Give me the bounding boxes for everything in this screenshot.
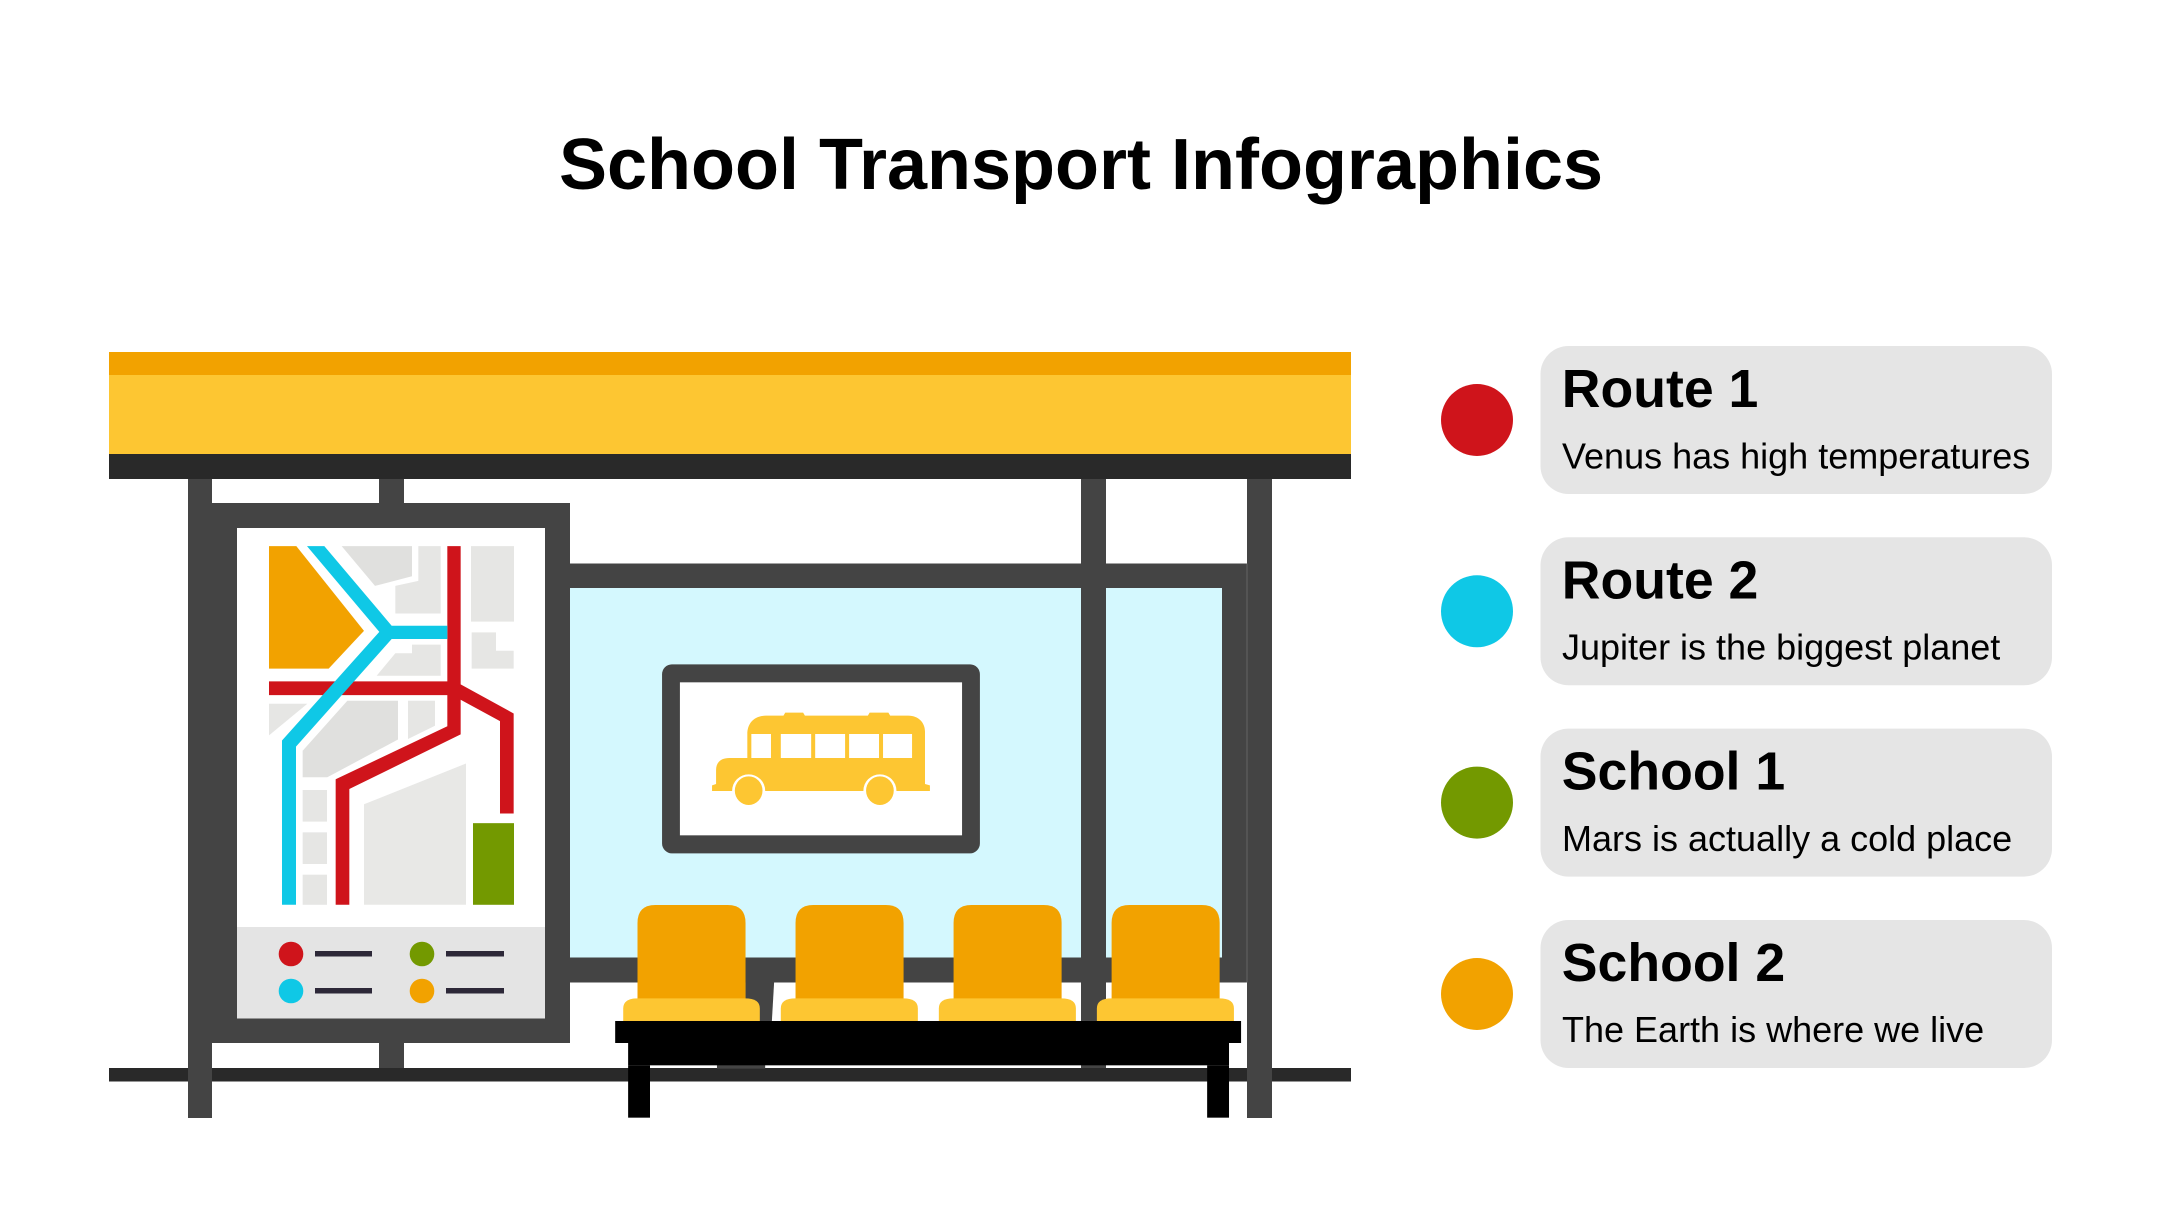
illustration: bus shelter (109, 352, 1351, 1118)
shelter posts (188, 479, 1272, 1118)
bus sign, seats and bench (615, 664, 1241, 1118)
roof (109, 352, 1351, 479)
legend item: route 1 (1441, 346, 2052, 494)
heading: Route 1 (1562, 359, 1758, 419)
legend item: school 2 (1441, 920, 2052, 1068)
card (1540, 920, 2052, 1068)
glass panel with frame (545, 564, 1247, 982)
description: Mars is actually a cold place (1562, 818, 2012, 859)
seat 2 (781, 905, 918, 1021)
bench (615, 1021, 1241, 1118)
bench support (717, 982, 774, 1069)
school 1 zone (473, 823, 514, 905)
card (1540, 346, 2052, 494)
description: The Earth is where we live (1562, 1009, 1984, 1050)
ground line (109, 1068, 1351, 1082)
orange marker (1441, 958, 1513, 1030)
map board (188, 503, 570, 1043)
heading: Route 2 (1562, 550, 1758, 610)
heading: School 1 (1562, 742, 1785, 802)
green marker (1441, 767, 1513, 839)
seat 1 (623, 905, 760, 1021)
seat 4 (1097, 905, 1234, 1021)
school 2 zone (269, 546, 364, 669)
card (1540, 729, 2052, 877)
map legend strip (237, 927, 545, 1018)
title: School Transport Infographics (559, 125, 1603, 205)
heading: School 2 (1562, 933, 1785, 993)
cyan marker (1441, 575, 1513, 647)
red marker (1441, 384, 1513, 456)
route 2 line (282, 546, 447, 905)
card (1540, 537, 2052, 685)
icon: school bus (712, 713, 930, 808)
bus sign (662, 664, 980, 853)
description: Venus has high temperatures (1562, 435, 2030, 476)
seat 3 (939, 905, 1076, 1021)
legend item: route 2 (1441, 537, 2052, 685)
route 1 line (269, 546, 514, 905)
description: Jupiter is the biggest planet (1562, 627, 2000, 668)
legend item: school 1 (1441, 729, 2052, 877)
route map (269, 546, 514, 905)
map blocks (269, 546, 514, 905)
